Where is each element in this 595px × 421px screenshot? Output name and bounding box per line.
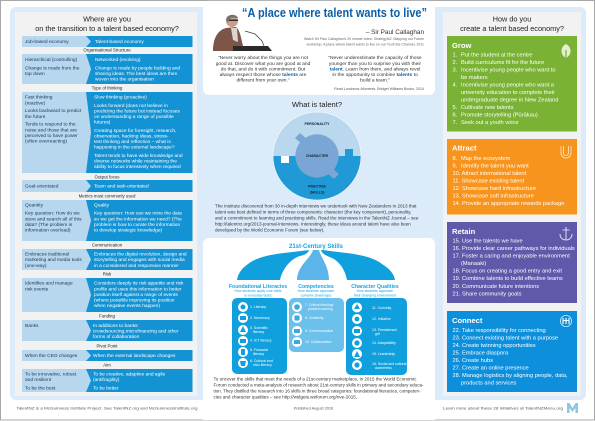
card: attract: Map the ecosystem: [461, 156, 511, 162]
paragraph: the institute discovered: The Institute discovered from 30 in-depth interviews we undertook with New Zealanders in 2013 that: [215, 203, 417, 208]
column: competencies: 8. Creativity: [305, 316, 324, 320]
card: grow: Cultivate new talents: [461, 105, 514, 111]
card: grow: 6.: [452, 113, 458, 119]
row: metrics: problem is how to curate the information: [94, 222, 180, 228]
row: type of thinking: Looks forward (does not believe in: [94, 103, 168, 109]
attribution: – Sir Paul Callaghan: [366, 29, 424, 36]
row: type of thinking: Talent tends to have wide knowledge and: [94, 153, 183, 159]
quote left: “Never worry about the things you are not: [218, 55, 309, 61]
column: competencies: How students approach: [298, 289, 334, 293]
row: metrics: information overload): [25, 227, 71, 233]
row: pivot point: [22, 350, 192, 361]
row: type of thinking: perceived to have power: [25, 133, 78, 139]
card: attract: 13. Showcase soft infrastructure: [452, 194, 534, 200]
card: grow: [447, 36, 577, 132]
diagram: character, personality, practise: PRACTISE: [308, 184, 327, 188]
diagram: character, personality, practise: PERSONALITY: [305, 122, 330, 126]
panel: how do you create: [443, 12, 581, 396]
paragraph: the institute discovered: http://talentnz.org/2013-journal-interviews. Interestingly, these ideas around talent have also been: [215, 221, 411, 226]
section label: aim: Aim: [103, 363, 111, 368]
row: organisational structure: top down: [25, 71, 45, 77]
card: retain: 18. Focus on creating a good entry and exit: [452, 269, 562, 275]
column: competencies: 7. Critical thinking/: [305, 303, 334, 307]
chart: 21st-century skills: [229, 244, 407, 375]
video note: Watch Sir Paul Callaghan’s 20 minute video: StrategyNZ: Mapping our Future: [304, 37, 424, 41]
row: metrics: store and search all of this: [25, 216, 82, 222]
card: connect: 23. Connect existing talent with a purpose: [452, 336, 558, 342]
logo: M: [567, 403, 578, 413]
column: character qualities: 14. Adaptability: [372, 341, 396, 345]
card: grow: undergraduate degree in New Zealand: [461, 98, 558, 104]
column: foundational literacies: literacy: [253, 352, 264, 356]
branch: middle: [297, 250, 329, 280]
card: retain: 15. Use the talents we have: [452, 238, 523, 244]
card: attract: 9.: [452, 164, 458, 170]
column: competencies: 9. Communication: [305, 329, 333, 333]
column: character qualities: How students approach: [357, 289, 393, 293]
card: connect: 26. Create hubs: [452, 358, 493, 364]
row: risk: position itself against a range of events: [94, 292, 178, 298]
footer right: Learn more about these 28 initiatives at TalentNZMenu.org: [443, 406, 563, 410]
row: metrics: so we get the information we need? (The: [94, 216, 182, 222]
card: attract: 14. Provide an appropriate rewards package: [452, 201, 564, 207]
card: grow: Promote storytelling (Pūrākau): [461, 113, 538, 119]
card: attract: Attract: [452, 144, 477, 152]
paragraph: to uncover the skills: cies and character qualities – see http://widgets.weforum.org/nve-2015.: [214, 394, 357, 400]
row: type of thinking: predicting the future but instead focuses: [94, 108, 180, 114]
column: character qualities: grit: [375, 332, 380, 336]
column: foundational literacies: Foundational Literacies: [229, 284, 287, 290]
icon: leaf: [562, 44, 570, 58]
row: aim: To be innovative, robust: [25, 372, 77, 378]
row: funding: forms of collaboration: [93, 334, 140, 340]
quote source: Read Luminous Moments, Bridget Williams Books, 2014: [334, 87, 424, 91]
row: aim: To be better: [93, 385, 119, 391]
row: communication: in a considered and responsive manner: [94, 263, 179, 269]
row: job-based vs talent-based: Talent-based economy: [95, 39, 144, 45]
card: retain: 17. Foster a caring and enjoyable environment: [452, 254, 570, 260]
video note: workshop: A place where talent wants to live on our YouTube Channel, 2011: [306, 43, 424, 47]
title quote: “A place where talent wants to live”: [242, 6, 427, 20]
card: grow: 7.: [452, 120, 458, 126]
column: character qualities: awareness: [375, 366, 392, 370]
row: risk: [22, 278, 192, 312]
column: foundational literacies: 3. Scientific: [250, 326, 268, 330]
row: funding: Banks: [25, 323, 39, 329]
row: type of thinking: test thinking and reflection – what is: [94, 139, 171, 145]
column: character qualities: their changing environment: [354, 293, 396, 297]
card: connect: 28. Manage logistics by aligning people, data,: [452, 373, 568, 379]
row: organisational structure: sharing ideas. The best ideas are then: [95, 71, 178, 77]
card: connect: Connect: [452, 316, 483, 325]
panel: where are you on the transition: [15, 12, 197, 396]
row: output focus: Team and task-orientated: [94, 183, 149, 189]
published date: Published August 2016: [294, 406, 333, 410]
section label: pivot point: Pivot Point: [96, 344, 118, 349]
row: risk: when negative events happen): [94, 303, 160, 309]
row: communication: (one-way): [25, 263, 47, 269]
heading: how do you: [460, 14, 564, 33]
chart heading: 21st-Century Skills: [289, 244, 344, 250]
heading: where are you: Where are you: [83, 14, 131, 24]
card: grow: Incentivise young people who want to: [461, 68, 556, 74]
card: attract: [447, 139, 577, 214]
section label: output focus: Output focus: [95, 175, 120, 180]
column: foundational literacies: 4. ICT literacy: [250, 339, 272, 343]
column: competencies: complex challenges: [301, 293, 332, 297]
column: competencies: 10. Collaboration: [305, 340, 332, 344]
paragraph: the institute discovered: developed by the World Economic Forum (see below).: [215, 227, 324, 232]
row: aim: To be creative, adaptive and agile: [93, 372, 165, 378]
card: grow: Grow: [452, 41, 472, 50]
row: metrics: Key question: How can we mine the data: [94, 211, 182, 217]
card: grow: Seek out a youth voice: [461, 120, 519, 126]
photo: Sir Paul Callaghan at podium: [213, 15, 272, 51]
card: retain: 21. Share community goals: [452, 291, 522, 297]
card: connect: 24. Create twinning opportunities: [452, 343, 536, 349]
row: organisational structure: Networked (evolving): [95, 57, 141, 63]
card: retain: (Manaaki): [461, 261, 486, 267]
card: connect: 25. Embrace diaspora: [452, 351, 509, 357]
row: aim: (antifragility): [93, 377, 120, 383]
column: foundational literacies: literacy: [253, 330, 264, 334]
section label: communication: Communication: [92, 243, 123, 248]
row: type of thinking: Slow thinking (proactive): [94, 95, 147, 101]
card: retain: [447, 222, 577, 303]
row: type of thinking: the future: [25, 114, 46, 120]
row: type of thinking: noise and those that are: [25, 127, 77, 133]
card: connect: 27. Create an online presence: [452, 366, 529, 372]
column: foundational literacies: 5. Financial: [250, 348, 268, 352]
row: job-based vs talent-based: Job-based economy: [25, 39, 69, 45]
row: metrics: Quantity: [25, 203, 44, 209]
section label: type of thinking: Type of thinking: [92, 86, 123, 91]
row: type of thinking: on understanding a range of possible: [94, 114, 174, 120]
paragraph: to uncover the skills: Forum conducted a meta-analysis of research about 21st-century skills in primary and secondary educa-: [214, 382, 424, 388]
row: type of thinking: futures): [94, 120, 111, 126]
row: risk: Considers deeply its risk appetite and risk: [94, 281, 184, 287]
row: risk: profile and uses this information to better: [94, 286, 182, 292]
card: grow: Build curriculums fit for the future: [461, 60, 544, 66]
row: pivot point: When the CEO changes: [25, 353, 78, 359]
row: type of thinking: diverse networks while maintaining the: [94, 159, 177, 165]
card: grow: Put the student at the centre: [461, 53, 532, 59]
column: character qualities: 12. Initiative: [372, 317, 391, 321]
quote right: build a team.”: [360, 78, 390, 84]
card: retain: Retain: [452, 227, 476, 236]
card: attract: 11. Showcase existing talent: [452, 178, 525, 184]
row: funding: crowdsourcing,microfinancing and other: [93, 329, 179, 335]
row: type of thinking: [22, 92, 192, 173]
quote right: in the opportunity to combine talents to: [332, 73, 418, 78]
row: aim: [22, 369, 192, 392]
icon: connect: [560, 315, 572, 327]
column: foundational literacies: civic literacy: [253, 363, 272, 367]
row: metrics: [22, 200, 192, 241]
column: character qualities: 11. Curiosity: [372, 306, 391, 310]
paragraph: to uncover the skills: tion. They distilled the research into 16 skills in three broad categories: foundational literacies, competen-: [214, 388, 421, 394]
row: job-based vs talent-based: [22, 36, 192, 47]
icon: anchor: [560, 227, 572, 240]
row: type of thinking: Looks backward to predict: [25, 108, 82, 114]
row: risk: Identifies and manage: [25, 281, 73, 287]
section label: funding: Funding: [99, 314, 115, 319]
card: attract: 10. Attract international talent: [452, 171, 527, 177]
heading: where are you: [35, 14, 179, 33]
card: grow: Incentivise young people who want a: [461, 83, 555, 89]
row: risk: risk events: [25, 286, 49, 292]
card: attract: 12. Showcase hard infrastructure: [452, 186, 536, 192]
card: retain: 19. Combine talents to build effective teams: [452, 276, 563, 282]
column: foundational literacies: to everyday tasks: [244, 293, 272, 297]
card: connect: products and services: [461, 381, 516, 387]
column: foundational literacies: 6. Cultural and: [250, 359, 273, 363]
card: connect: [447, 311, 577, 392]
row: type of thinking: Fast thinking: [25, 95, 53, 101]
heading: how do you: How do you: [493, 14, 531, 24]
card: retain: 20. Communicate future intentions: [452, 284, 539, 290]
row: aim: To be the best: [25, 385, 56, 391]
row: metrics: data? (The problem is: [25, 222, 73, 228]
row: output focus: Goal-orientated: [25, 183, 59, 189]
card: grow: 2.: [452, 60, 458, 66]
column: character qualities: 16. Social and cultural: [372, 362, 407, 366]
heading: how do you: create a talent based economy?: [460, 24, 564, 33]
row: type of thinking: happening in the external landscape?: [94, 144, 175, 150]
branch: left: [237, 250, 309, 280]
card: grow: 1.: [452, 53, 458, 59]
section label: metrics: Metrics most commonly used: [79, 194, 136, 199]
section label: risk: Risk: [103, 272, 112, 277]
row: type of thinking: observation, hacking ideas, stress-: [94, 134, 169, 140]
row: type of thinking: Tends to respond to the: [25, 122, 76, 128]
column: foundational literacies: 2. Numeracy: [250, 316, 270, 320]
row: organisational structure: woven into the organisation: [95, 77, 154, 83]
row: communication: storytelling and engages with social media: [94, 257, 185, 263]
row: aim: and resilient: [25, 377, 52, 383]
diagram: character, personality, practise: (SKILLS): [310, 190, 324, 194]
row: communication: marketing and media tools: [25, 257, 82, 263]
row: communication: [22, 249, 192, 270]
paragraph: to uncover the skills: To uncover the skills that meet the needs of a 21st-century marketplace, in 2015 the World Economic: [214, 376, 417, 382]
paragraph: the institute discovered: and a commitment to learning and practising skills. Read the interviews in the TalentNZ Journal – see: [215, 215, 419, 220]
row: metrics: to develop strategic knowledge): [94, 227, 163, 233]
row: type of thinking: Creating space for foresight, research,: [94, 128, 176, 134]
column: character qualities: Character Qualities: [351, 284, 399, 290]
card: connect: 22. Take responsibility for connecting: [452, 328, 546, 334]
quote left: always respect those whose talents are: [220, 73, 306, 78]
card: grow: 4.: [452, 83, 458, 89]
column: character qualities: 13. Persistence/: [372, 328, 397, 332]
icon: magnet: [561, 146, 571, 158]
quote right: younger than you to surprise you with their: [329, 61, 421, 67]
heading: where are you: on the transition to a talent based economy?: [35, 24, 179, 33]
row: organisational structure: [22, 54, 192, 84]
diagram: character, personality, practise: CHARACTER: [306, 154, 329, 158]
row: pivot point: When the external landscape changes: [93, 353, 176, 359]
row: communication: Embraces traditional: [25, 252, 69, 258]
row: organisational structure: Change is made by people building and: [95, 65, 180, 71]
quote right: “Never underestimate the capacity of those: [328, 55, 422, 61]
row: organisational structure: Hierarchical (controlling): [25, 57, 78, 63]
row: metrics: Key question: How do we: [25, 211, 80, 217]
column: competencies: problem-solving: [308, 307, 333, 311]
column: foundational literacies: How students apply core skills: [235, 289, 282, 293]
branch: right: [321, 250, 395, 280]
column: foundational literacies: 1. Literacy: [250, 305, 266, 309]
card: grow: 5.: [452, 105, 458, 111]
column: competencies: Competencies: [298, 284, 334, 290]
quote right: talent. Learn from them, and always revel: [330, 67, 420, 72]
heading: what is talent: What is talent?: [292, 100, 342, 109]
column: character qualities: 15. Leadership: [372, 352, 395, 356]
column: character qualities: [346, 284, 407, 375]
card: grow: university education to complete their: [461, 90, 555, 96]
card: grow: 3.: [452, 68, 458, 74]
section label: organisational structure: Organisational Structure: [83, 48, 131, 53]
card: retain: 16. Provide clear career pathways for individuals: [452, 246, 575, 252]
row: risk: (where possible improving its position: [94, 298, 175, 304]
quote left: different from your own.”: [237, 78, 290, 84]
column: foundational literacies: [229, 284, 287, 374]
row: funding: [22, 320, 192, 341]
row: type of thinking: (often overreacting): [25, 139, 67, 145]
card: attract: 8.: [452, 156, 458, 162]
row: communication: Embraces the digital revolution, design and: [94, 252, 187, 258]
footer left: TalentNZ is a McGuinness Institute Project. See TalentNZ.org and McGuinnessInstitute.org: [16, 406, 198, 410]
card: attract: Identify the talent you want: [461, 164, 529, 170]
quote left: good at. Discover what you are good at and: [216, 61, 311, 67]
paragraph: the institute discovered: talent was best defined in terms of three components: character (the key component), personality,: [215, 209, 411, 214]
quote left: do that, and do it with commitment. But: [221, 66, 306, 72]
row: type of thinking: ability to focus intensively when required: [94, 164, 181, 170]
row: output focus: [22, 180, 192, 192]
diagram: character, personality, practise: [273, 112, 361, 200]
row: type of thinking: (reactive): [25, 100, 46, 106]
row: organisational structure: Change is made from the: [25, 65, 80, 71]
column: competencies: [289, 284, 344, 352]
row: funding: In additions to banks:: [93, 323, 139, 329]
card: grow: be makers: [461, 75, 488, 81]
row: metrics: Quality: [94, 203, 110, 209]
